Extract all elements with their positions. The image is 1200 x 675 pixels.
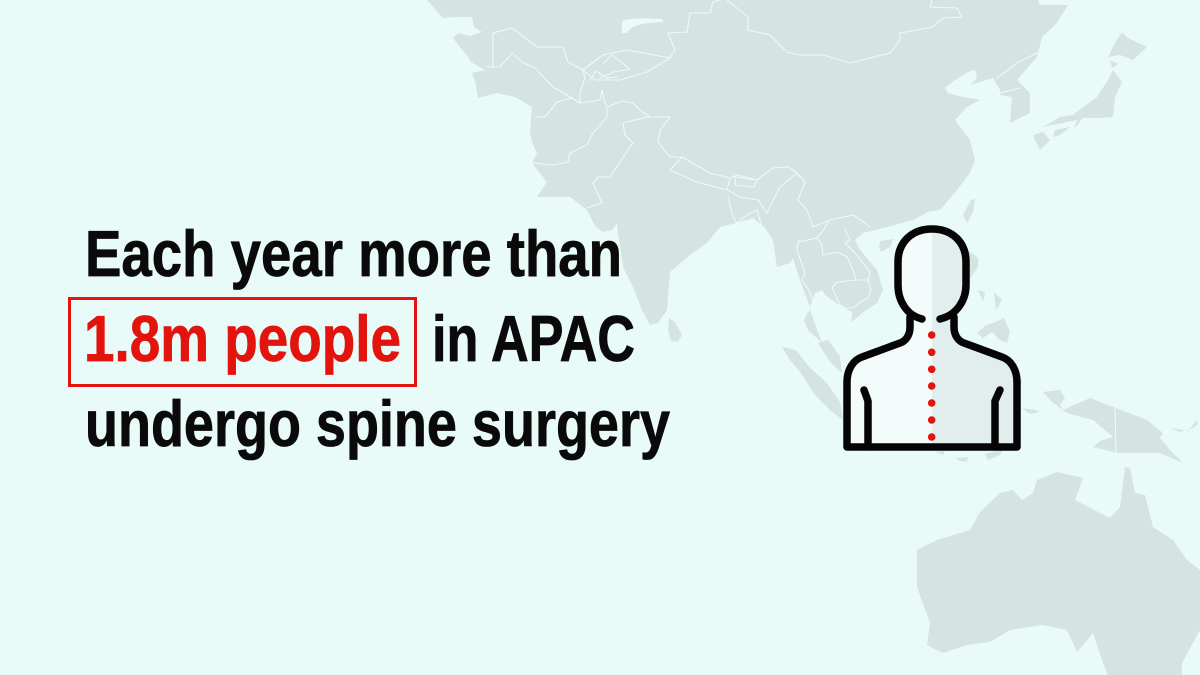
icon: body fill right half [932,229,1017,447]
map: New Britain [1170,420,1198,432]
map: Malay peninsula south [818,340,842,373]
map: New Guinea [1043,390,1183,463]
map: Lesser Sunda islands [935,449,1003,462]
map: Hainan [879,239,893,252]
map: Sumatra [782,347,843,420]
highlight box around figure [70,298,416,386]
headline text block [70,217,670,460]
red highlighted number: 1.8m people [84,302,401,375]
icon: human torso with spine [847,229,1017,447]
map: Australia [917,467,1200,675]
map: Philippines [968,250,1010,343]
map: Japan [1033,32,1147,150]
map: country borders [487,0,1116,453]
map: Taiwan [963,199,975,223]
headline line 3: undergo spine surgery [85,387,670,460]
map: Aral Sea [622,18,663,33]
headline line 2 remainder: in APAC [432,302,635,375]
map: Sri Lanka [668,318,682,342]
icon: body fill left half [847,229,932,447]
background map of Asia-Pacific [427,0,1200,675]
icon: body outline [847,229,1017,447]
map: Sulawesi [1012,375,1040,414]
icon: spine dots [928,331,936,441]
map: Asian mainland [427,0,1068,343]
headline line 1: Each year more than [85,217,622,290]
